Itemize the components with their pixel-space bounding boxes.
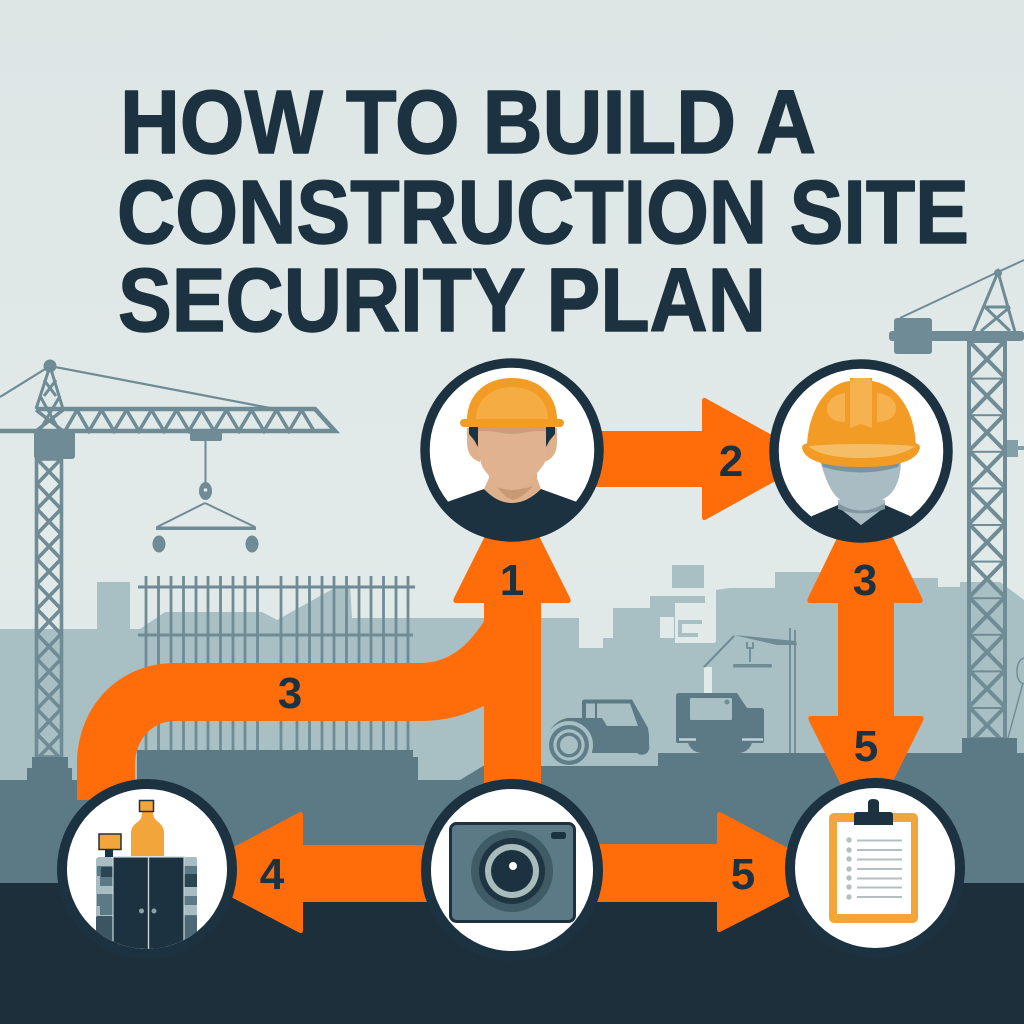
crane: right — [889, 260, 1024, 739]
double arrow: steps 3 and 5 — [807, 480, 924, 835]
arrow: step 4 left — [185, 812, 440, 933]
ground mid layer — [0, 738, 1024, 900]
road roller — [545, 700, 649, 769]
step numbers: 3 — [853, 556, 877, 605]
step numbers: 4 — [260, 850, 285, 899]
step numbers: 2 — [719, 437, 743, 486]
step numbers — [260, 437, 878, 899]
skyline silhouette — [0, 572, 1024, 800]
title: SECURITY PLAN — [118, 251, 766, 351]
security fence — [138, 576, 415, 752]
step numbers: 3 — [278, 669, 302, 718]
icon: hard hat with faceless head — [774, 364, 948, 570]
curved arrow path: step 3 — [77, 612, 490, 800]
arrow: step 5 right — [590, 812, 835, 932]
step numbers: 5 — [854, 722, 878, 771]
icon: worker with hard hat — [424, 363, 600, 560]
ground dark layer — [0, 883, 1024, 1024]
truck — [676, 693, 764, 753]
step numbers: 5 — [731, 850, 755, 899]
title: HOW TO BUILD A — [120, 73, 816, 173]
skyline windows — [660, 565, 715, 643]
icon: security camera — [426, 784, 598, 956]
icon: clipboard checklist — [790, 783, 960, 953]
arrow: step 2 right — [590, 398, 815, 520]
step numbers: 1 — [500, 556, 524, 605]
crane: left — [0, 360, 335, 757]
icon: gate cabinet with lights — [62, 784, 232, 957]
arrow: step 1 up — [453, 482, 571, 800]
small mobile crane — [704, 628, 797, 753]
title — [117, 73, 969, 351]
